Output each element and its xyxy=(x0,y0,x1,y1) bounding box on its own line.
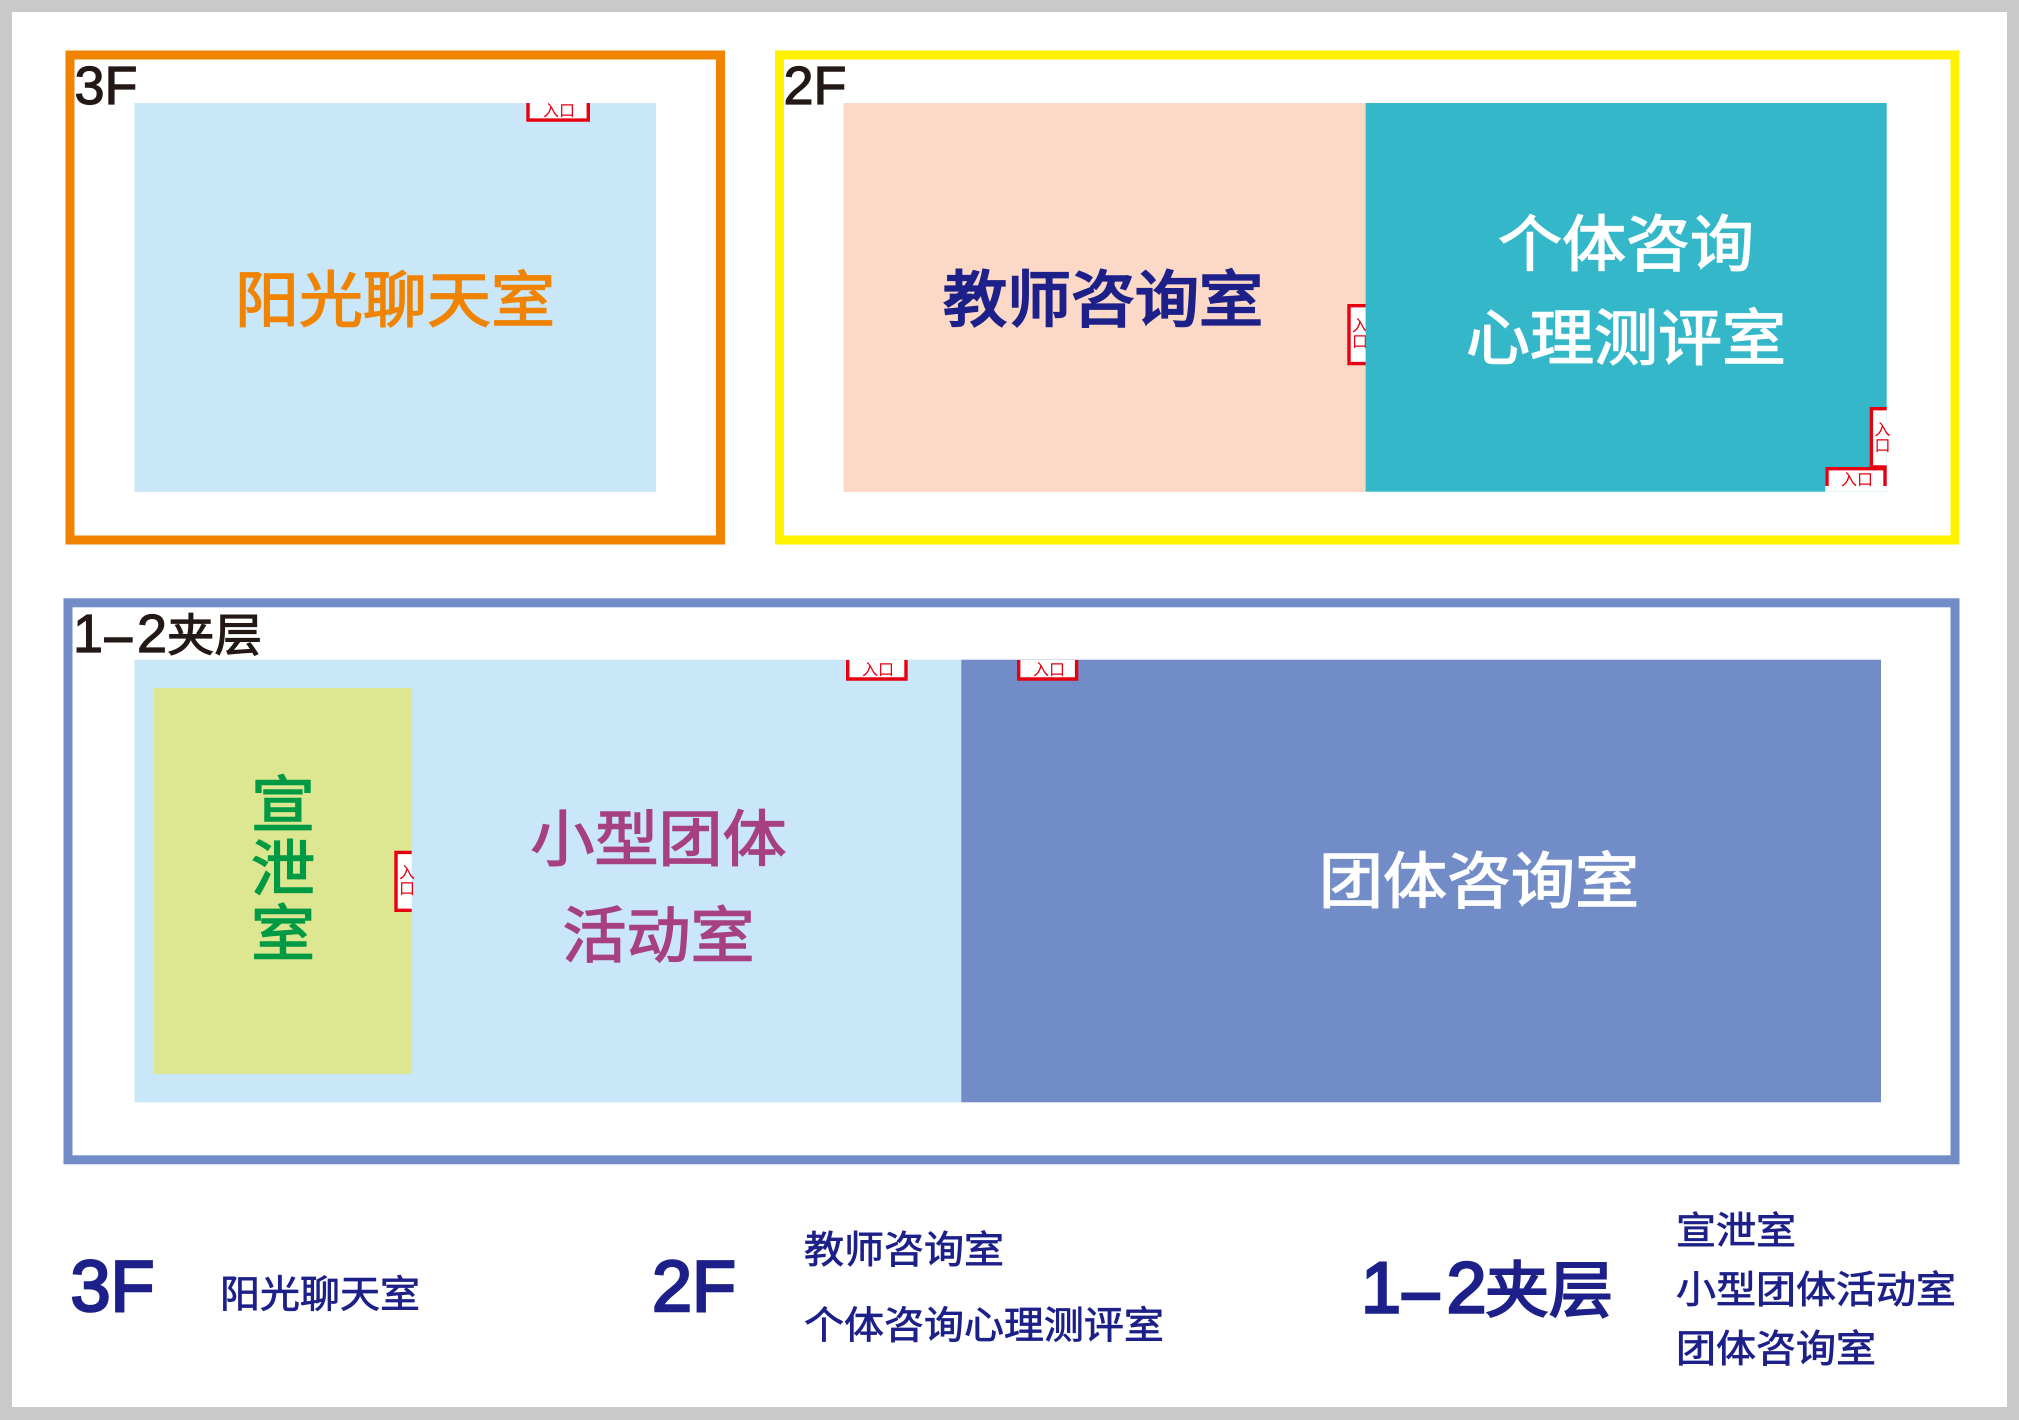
entrance door: 个体咨询 right: 入 xyxy=(1874,422,1891,439)
entrance door: 团体咨询室 xyxy=(1019,660,1077,679)
legend: 1-2夹层 xyxy=(1361,1211,1956,1371)
entrance door: 宣泄室: 口 xyxy=(399,881,415,898)
entrance door: 个体咨询 right xyxy=(1871,409,1891,467)
room: 教师咨询室: 教师咨询室 xyxy=(943,266,1263,335)
room: 宣泄室 xyxy=(154,688,412,1074)
heading: 3F: 3F xyxy=(74,56,138,116)
heading: 1-2夹层: 夹层 xyxy=(167,610,262,661)
legend: 3F xyxy=(70,1247,420,1327)
entrance door: 小型团体活动室 xyxy=(848,660,906,679)
room: 小型团体活动室: 小型团体 xyxy=(531,806,786,874)
legend: 1-2夹层: 1 xyxy=(1361,1248,1401,1328)
room: 宣泄室: 室 xyxy=(251,900,315,969)
room: 宣泄室: 宣 xyxy=(251,771,315,840)
heading: 1-2夹层: – xyxy=(105,610,132,663)
legend: 1-2夹层: 宣泄室 xyxy=(1676,1211,1796,1253)
entrance door: 3F xyxy=(528,103,588,120)
panel: 3F xyxy=(70,55,720,540)
room: 个体咨询心理测评室: 心理测评室 xyxy=(1466,305,1786,373)
heading: 1-2夹层 xyxy=(73,604,262,664)
legend: 2F xyxy=(652,1230,1164,1347)
entrance door: 教师咨询室 xyxy=(1349,306,1368,364)
entrance door: 团体咨询室: 入口 xyxy=(1033,662,1065,679)
legend: 2F: 个体咨询心理测评室 xyxy=(804,1305,1164,1347)
legend: 3F: 阳光聊天室 xyxy=(220,1274,420,1316)
entrance door: 教师咨询室: 口 xyxy=(1352,334,1368,351)
entrance door: 小型团体活动室: 入口 xyxy=(862,662,894,679)
room: 教师咨询室 xyxy=(844,103,1366,492)
legend: 2F: 2F xyxy=(652,1247,736,1327)
legend: 1-2夹层: 夹层 xyxy=(1485,1257,1613,1325)
room: 宣泄室: 泄 xyxy=(251,836,315,904)
legend: 1-2夹层: 2 xyxy=(1446,1248,1487,1328)
room: 阳光聊天室: 阳光聊天室 xyxy=(235,267,555,335)
legend: 1-2夹层: 小型团体活动室 xyxy=(1676,1270,1956,1312)
legend: 2F: 教师咨询室 xyxy=(804,1230,1004,1272)
panel: 2F xyxy=(780,55,1955,540)
heading: 1-2夹层: 1 xyxy=(73,604,103,664)
entrance door: 教师咨询室: 入 xyxy=(1352,318,1368,335)
room: 团体咨询室: 团体咨询室 xyxy=(1319,848,1639,916)
heading: 2F: 2F xyxy=(784,56,847,116)
legend: 1-2夹层: – xyxy=(1403,1254,1439,1326)
entrance door: 宣泄室 xyxy=(396,852,415,910)
entrance door: 3F: 入口 xyxy=(543,103,575,120)
entrance door: 心理测评室 bottom: 入口 xyxy=(1841,472,1873,489)
room: 团体咨询室 xyxy=(961,660,1881,1102)
room: 阳光聊天室 xyxy=(134,103,656,492)
legend: 1-2夹层: 团体咨询室 xyxy=(1676,1329,1876,1371)
legend: 3F: 3F xyxy=(70,1247,155,1327)
entrance door: 个体咨询 right: 口 xyxy=(1874,438,1891,455)
room: 个体咨询心理测评室 xyxy=(1366,103,1887,492)
entrance door: 宣泄室: 入 xyxy=(399,865,415,882)
panel: 1-2 mezzanine xyxy=(68,603,1955,1160)
heading: 1-2夹层: 2 xyxy=(137,604,167,664)
room: 小型团体活动室: 活动室 xyxy=(563,902,754,971)
entrance door: 心理测评室 bottom xyxy=(1825,467,1887,492)
room: 小型团体活动室 xyxy=(134,660,961,1102)
room: 个体咨询心理测评室: 个体咨询 xyxy=(1498,211,1754,279)
